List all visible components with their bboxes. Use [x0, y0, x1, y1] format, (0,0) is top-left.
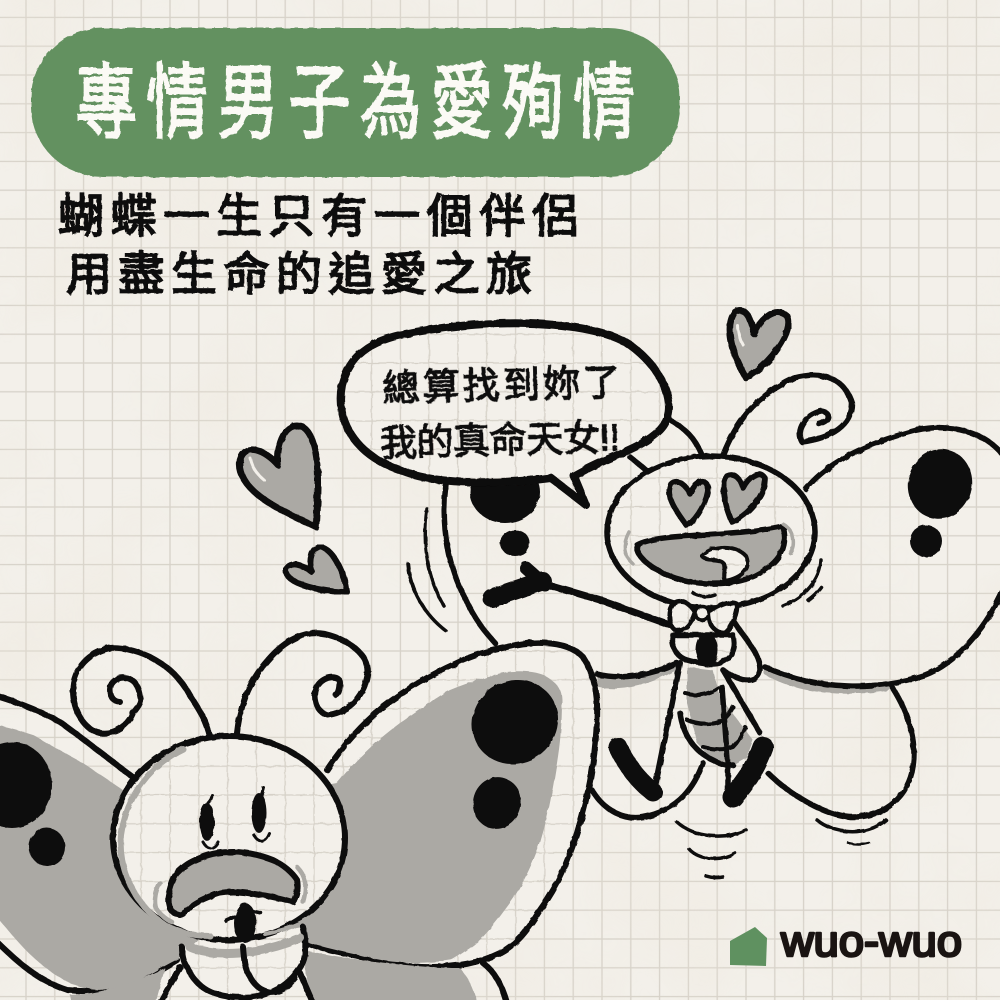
back butterfly wing shadows	[597, 663, 897, 694]
antennae	[73, 633, 368, 737]
motion lines	[408, 509, 886, 878]
sad mouth	[168, 852, 298, 915]
tongue	[702, 547, 748, 581]
back butterfly legs and feet	[618, 663, 763, 797]
icon: green house	[730, 927, 767, 966]
front left wing	[0, 694, 177, 991]
wing grey fills	[0, 671, 562, 1000]
speech text: 總算找到妳了	[382, 362, 621, 409]
heart: top right	[730, 310, 789, 378]
head	[113, 736, 345, 940]
brand name: wuo-wuo	[780, 917, 962, 966]
logo	[730, 917, 962, 966]
speech text: 我的真命天女!!	[379, 417, 620, 464]
lower wing outlines	[483, 963, 507, 1000]
back butterfly body	[680, 667, 760, 797]
front right wing	[307, 643, 597, 967]
back butterfly collar and bow tie	[670, 593, 737, 667]
open smiling mouth	[637, 526, 785, 584]
subtitle text	[58, 190, 578, 300]
back butterfly head	[607, 456, 815, 608]
neck and collar	[160, 927, 380, 1000]
title banner	[31, 28, 680, 177]
sad eyes	[200, 787, 269, 848]
back butterfly wing dots	[470, 442, 980, 557]
title text: 專情男子為愛殉情	[75, 58, 635, 149]
speech bubble	[341, 323, 669, 505]
heart: large left	[240, 426, 318, 527]
speech text	[378, 362, 622, 464]
back butterfly wings	[444, 428, 1000, 818]
wing dots	[0, 663, 575, 866]
back butterfly arm pointing	[492, 568, 760, 680]
subtitle text: 用盡生命的追愛之旅	[66, 248, 532, 300]
cheek marks	[155, 867, 305, 922]
heart eyes	[669, 474, 765, 526]
front butterfly: heartbroken	[0, 633, 597, 1000]
heart: small left	[286, 547, 347, 592]
nose	[226, 903, 261, 943]
head shadow	[121, 749, 312, 936]
cheek marks	[625, 524, 793, 564]
back butterfly: in love, flying	[408, 375, 1000, 878]
back butterfly antennae	[668, 375, 852, 455]
subtitle text: 蝴蝶一生只有一個伴侶	[58, 190, 578, 242]
